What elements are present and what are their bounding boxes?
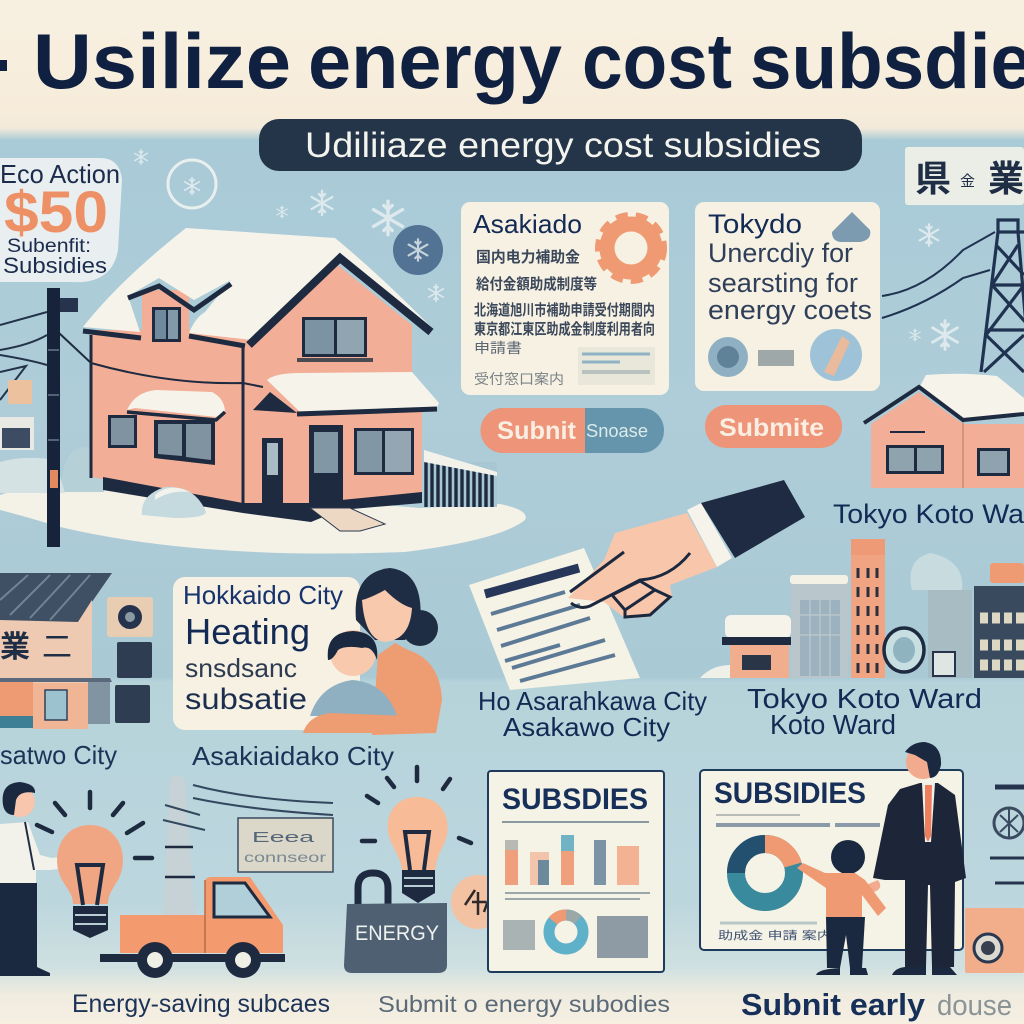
title: Usilize [33, 17, 291, 105]
Tokyo Koto buildings [700, 539, 1024, 678]
eco action callout: Eco Action [0, 159, 120, 189]
right side gadgets [965, 787, 1024, 973]
pointing hand [568, 480, 805, 618]
bush [142, 487, 206, 518]
icon: house badge [832, 212, 870, 242]
wires over wall [59, 333, 263, 387]
pole and truck: connseor [244, 849, 326, 865]
label: submit early [741, 987, 1012, 1022]
steps and fence [310, 508, 385, 531]
subsidies panel 2: SUBSIDIES [714, 777, 866, 810]
label: Tokyo Koto Ward: Tokyo Koto Ward [747, 683, 982, 714]
house walls [91, 262, 422, 503]
eco action callout: Subsidies [3, 253, 107, 278]
label: energy-saving subsidies: Energy-saving subcaes [72, 990, 330, 1018]
icon: light bulb and padlock [344, 767, 505, 973]
Hokkaido City card: snsdsanc [185, 653, 297, 683]
small house right [864, 374, 1024, 488]
white cloud [910, 553, 962, 590]
card: Asakiado: 北海道旭川市補助申請受付期間内 [474, 301, 655, 319]
label: Asakiaidako City: Asakiaidako City [192, 741, 394, 771]
label: submit early: douse [937, 990, 1012, 1022]
submit button 2 [705, 405, 842, 448]
card: Tokydo: Unercdiy for [708, 238, 853, 268]
eco action callout [0, 158, 122, 282]
submit button 1: Snoase [586, 421, 648, 441]
Japanese sign: 県 [915, 158, 951, 199]
title: energy [308, 17, 562, 105]
eco action callout: $50 [4, 180, 108, 245]
man and child [797, 742, 966, 975]
title [0, 17, 1024, 105]
Hokkaido City card: Hokkaido City [183, 580, 343, 610]
label: Tokyo Koto Ward [747, 683, 982, 740]
card: Asakiado: 申請書 [474, 340, 522, 356]
left house fragment: 二 [42, 631, 72, 664]
snowflakes right [910, 224, 957, 349]
subsidies panel 1 [488, 771, 664, 972]
porch roofs [127, 390, 225, 417]
Japanese sign: 業 [988, 158, 1024, 199]
label: submit early: Subnit early [741, 987, 926, 1022]
document [469, 548, 640, 690]
subtitle banner: Udiliiaze energy cost subsidies [305, 126, 821, 165]
Hokkaido City card: subsatie [185, 683, 307, 716]
icon: light bulb and padlock: ENERGY [355, 922, 439, 945]
left bush [61, 447, 104, 492]
card: Tokydo [695, 202, 880, 391]
Hokkaido City card: Heating [185, 611, 310, 652]
label: Asahikawa City: Ho Asarahkawa City [478, 686, 707, 716]
subsidies panel 2 [700, 770, 963, 950]
card: Asakiado: Asakiado [473, 209, 582, 239]
title: cost [582, 17, 732, 105]
subsidies panel 2: 助成金 申請 案内 [718, 928, 832, 942]
submit button 1 [481, 408, 664, 453]
card: Asakiado: 受付窓口案内 [474, 371, 564, 387]
mother and child [303, 568, 442, 735]
card: Tokydo: Tokydo [708, 209, 802, 239]
left house fragment: 業 [0, 631, 30, 664]
label: Asakawo city left: satwo City [0, 740, 117, 770]
card: Asakiado [461, 202, 669, 395]
Japanese sign [905, 147, 1024, 205]
submit button 1: Subnit [497, 417, 577, 445]
label: Asahikawa City: Asakawo City [503, 712, 670, 742]
transmission tower [882, 220, 1024, 372]
card: Asakiado: 給付金額助成制度等 [476, 275, 597, 293]
label: Tokyo Koto Ward: Koto Ward [770, 709, 896, 740]
left house fragment [0, 573, 153, 729]
snow decorations [135, 150, 443, 301]
upper windows [152, 307, 181, 342]
card: Tokydo: searsting for [708, 268, 858, 298]
pole and truck [100, 775, 333, 978]
card: Tokydo: energy coets [708, 295, 872, 325]
card: Asakiado: 東京都江東区助成金制度利用者向 [474, 320, 655, 338]
base [103, 477, 422, 522]
label: Tokyo Koto Ward upper: Tokyo Koto Wa [833, 499, 1024, 529]
lower windows [108, 415, 137, 448]
icon: sun [598, 215, 664, 281]
snow ground [0, 481, 526, 554]
large snowy house [0, 228, 526, 554]
eco action callout: Subenfit: [7, 236, 91, 257]
doors [262, 438, 283, 505]
label: submit to energy subsidies: Submit o energy subodies [378, 991, 670, 1017]
roof snow [83, 228, 431, 340]
utility pole and wires [0, 288, 78, 547]
subsidies panel 1: SUBSDIES [502, 783, 648, 816]
card: Asakiado: 国内电力補助金 [476, 248, 580, 266]
pole and truck: Eeea [252, 829, 315, 846]
Hokkaido City card [173, 577, 360, 730]
icon: light bulb left [37, 792, 152, 938]
man with bulb [0, 782, 68, 976]
roof dark lines [249, 258, 431, 345]
Japanese sign: 金 [960, 173, 975, 190]
label: Asahikawa City [478, 686, 707, 742]
submit button 2: Submite [719, 414, 824, 442]
subtitle banner [259, 119, 862, 171]
